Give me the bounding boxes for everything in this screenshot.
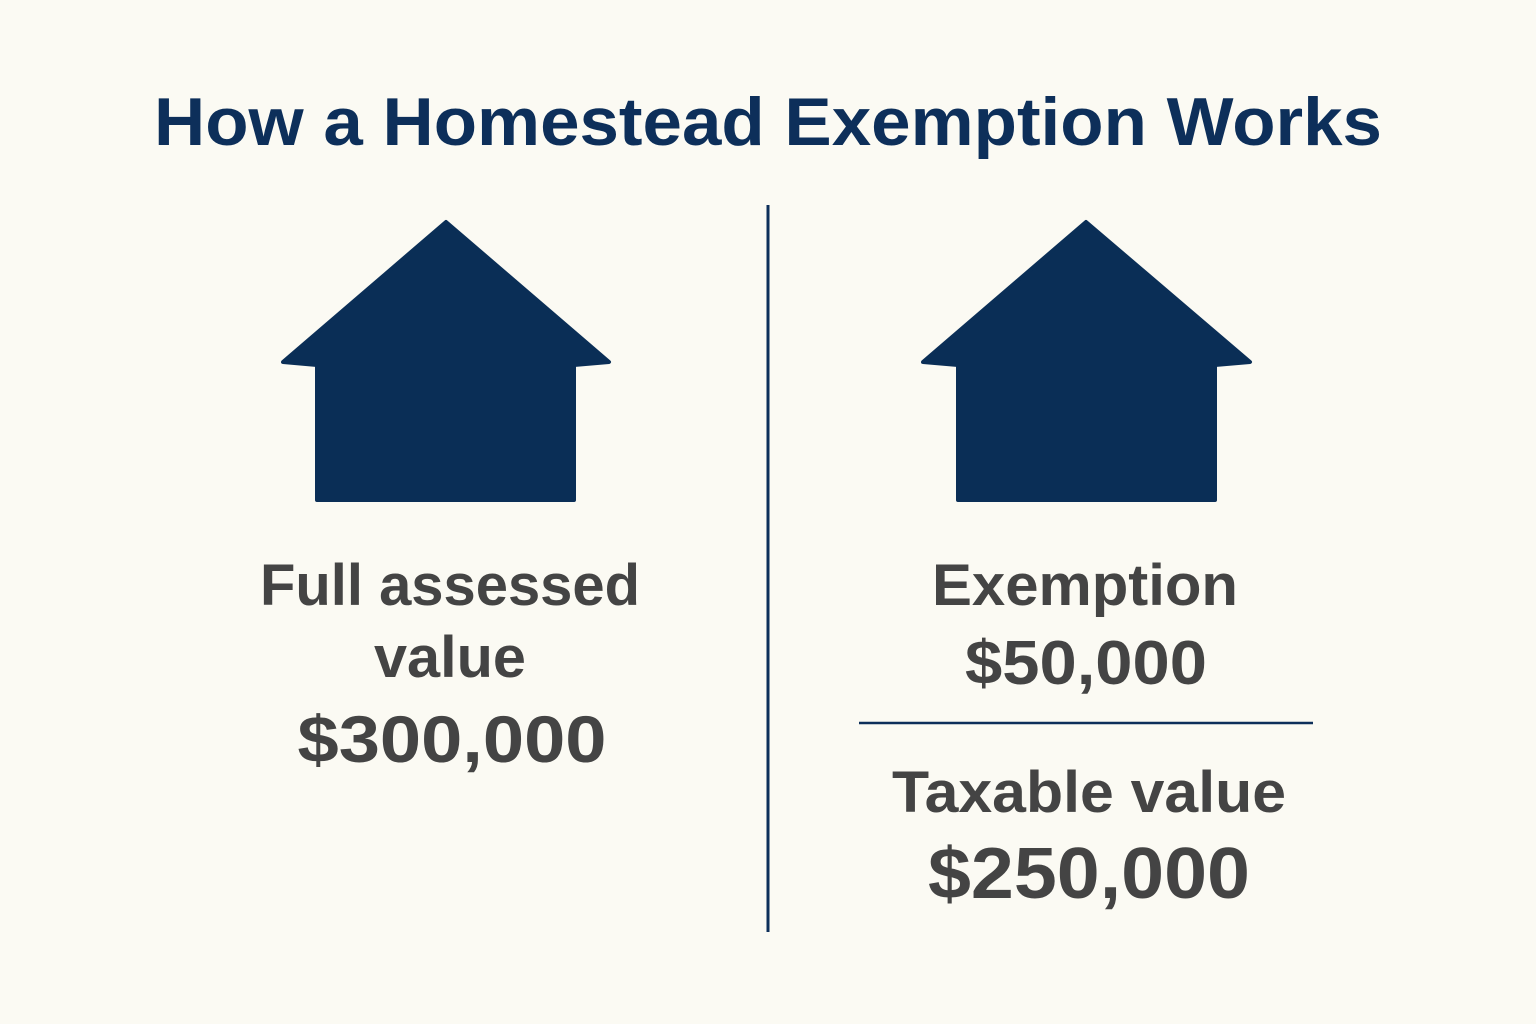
text block: exemption bbox=[932, 553, 1238, 698]
text block: taxable value bbox=[892, 760, 1286, 914]
text block: taxable value: Taxable value bbox=[892, 760, 1286, 825]
title: How a Homestead Exemption Works bbox=[154, 84, 1382, 160]
divider: vertical bbox=[766, 205, 770, 932]
text block: full assessed value: $300,000 bbox=[298, 702, 606, 776]
text block: full assessed value: Full assessed bbox=[260, 553, 640, 618]
text block: full assessed value bbox=[260, 553, 640, 776]
text block: exemption: $50,000 bbox=[965, 629, 1207, 698]
text block: exemption: Exemption bbox=[932, 553, 1238, 618]
icon: house left bbox=[283, 222, 609, 500]
icon: house right bbox=[923, 222, 1250, 500]
text block: taxable value: $250,000 bbox=[928, 834, 1250, 914]
divider: subtraction line bbox=[859, 722, 1313, 724]
text block: full assessed value: value bbox=[374, 625, 526, 690]
